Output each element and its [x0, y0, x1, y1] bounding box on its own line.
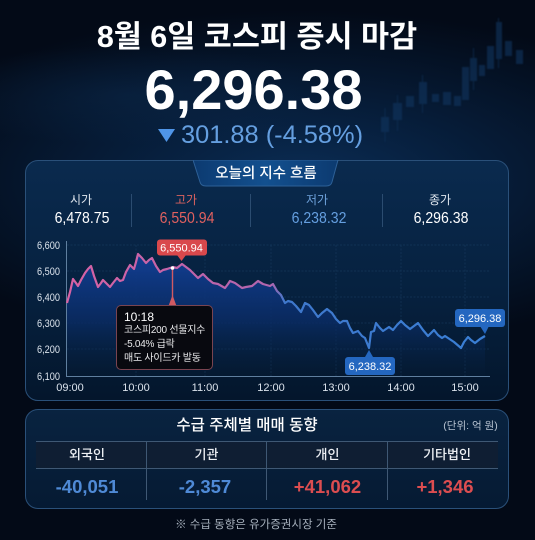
y axis labels: 6,300: [37, 318, 60, 330]
title: 8월 6일 코스피 증시 마감: [97, 20, 417, 54]
value: 6,478.75: [54, 210, 109, 227]
value: -2,357: [179, 476, 231, 497]
label: 기관: [195, 447, 218, 462]
index line: [67, 254, 485, 348]
y axis labels: 6,200: [37, 344, 60, 356]
axes: [66, 241, 490, 376]
y axis labels: [37, 240, 60, 383]
panel: trading by investor: [25, 409, 509, 509]
value: -40,051: [56, 476, 118, 497]
label: 종가: [429, 193, 451, 207]
label: 시가: [70, 193, 92, 207]
label: 개인: [316, 447, 339, 462]
value: 6,550.94: [159, 210, 214, 227]
column: other corporations: [416, 447, 474, 497]
index change: [158, 121, 363, 149]
area under line: [67, 254, 485, 376]
high marker: 6,550.94: [160, 242, 203, 254]
x axis labels: 10:00: [122, 382, 150, 394]
value: 6,238.32: [291, 210, 346, 227]
callout time: 10:18: [124, 310, 154, 324]
table: [36, 441, 498, 500]
column: individuals: [294, 447, 361, 497]
label: 저가: [306, 193, 328, 207]
x axis labels: 14:00: [387, 382, 415, 394]
value: +1,346: [416, 476, 474, 497]
stat: low: [291, 193, 346, 227]
x axis labels: [56, 382, 479, 394]
callout body: 매도 사이드카 발동: [124, 353, 201, 364]
callout body: [124, 324, 205, 364]
y axis labels: 6,600: [37, 240, 60, 252]
low marker: 6,238.32: [349, 361, 391, 373]
high marker: [157, 240, 207, 261]
value: 6,296.38: [413, 210, 468, 227]
x axis labels: 09:00: [56, 382, 84, 394]
unit note: (단위: 억 원): [443, 420, 498, 432]
column: foreigners: [56, 447, 118, 497]
callout body: -5.04% 급락: [124, 339, 175, 350]
y axis labels: 6,500: [37, 266, 60, 278]
change text: 301.88 (-4.58%): [181, 121, 363, 149]
stat: open: [54, 193, 109, 227]
value: +41,062: [294, 476, 361, 497]
callout body: 코스피200 선물지수: [124, 325, 205, 336]
column: institutions: [179, 447, 231, 497]
stat: close: [413, 193, 468, 227]
closing index value: 6,296.38: [145, 58, 362, 121]
table header band: [36, 441, 498, 469]
y axis labels: 6,100: [37, 371, 60, 383]
tab shape: [193, 160, 338, 186]
label: 고가: [175, 193, 197, 207]
panel heading tab: [193, 160, 338, 186]
x axis labels: 11:00: [192, 382, 218, 394]
y axis labels: 6,400: [37, 292, 60, 304]
tab heading: 오늘의 지수 흐름: [215, 166, 317, 182]
low marker: [345, 350, 395, 375]
label: 기타법인: [423, 447, 471, 462]
x axis labels: 13:00: [322, 382, 350, 394]
footnote: ※ 수급 동향은 유가증권시장 기준: [175, 519, 337, 531]
background candlestick decoration: [381, 18, 524, 134]
callout: 10:18 event: [116, 305, 213, 370]
panel: index flow: [25, 160, 509, 401]
x axis labels: 12:00: [257, 382, 285, 394]
label: 외국인: [69, 447, 105, 462]
line chart: [37, 240, 505, 394]
icon: down triangle: [158, 129, 175, 142]
event stem: [168, 266, 176, 306]
close marker: 6,296.38: [459, 313, 501, 325]
close marker: [455, 309, 505, 334]
supply heading: 수급 주체별 매매 동향: [176, 417, 318, 434]
stat: high: [159, 193, 214, 227]
x axis labels: 15:00: [451, 382, 479, 394]
